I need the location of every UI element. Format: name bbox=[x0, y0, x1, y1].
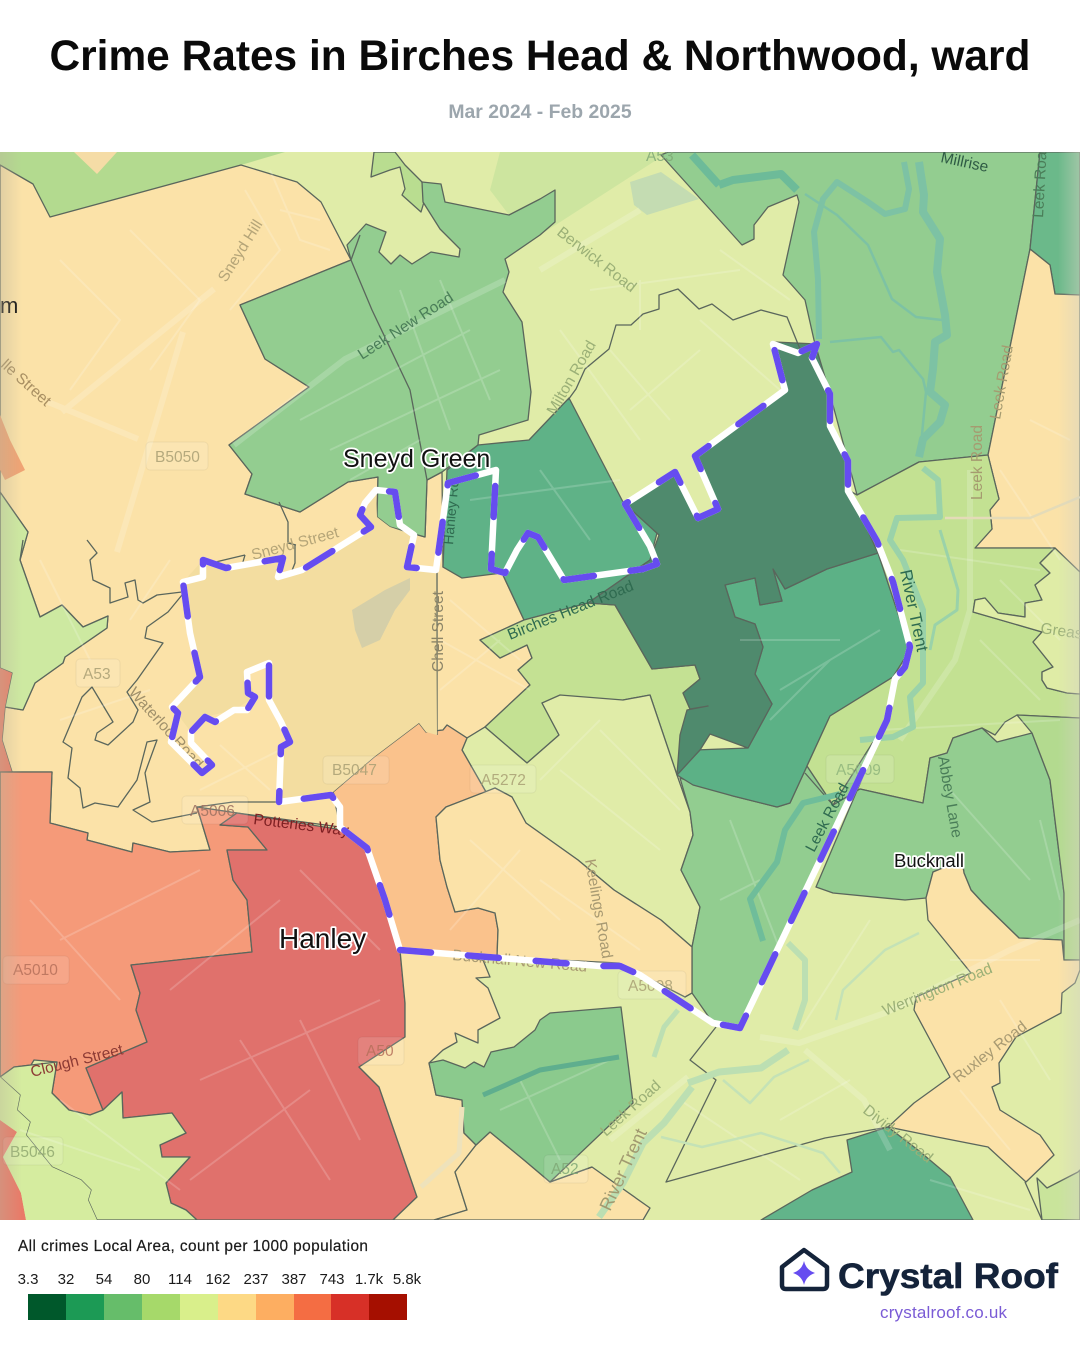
map place and road labels: m bbox=[0, 293, 18, 318]
map place and road labels: Potteries Way bbox=[253, 811, 350, 840]
ward interior tint bbox=[172, 490, 437, 802]
road number badges: A50 bbox=[366, 1043, 394, 1060]
road number badges: A5272 bbox=[481, 772, 526, 789]
road number badges: A5008 bbox=[628, 978, 673, 995]
road number badges: A5006 bbox=[190, 803, 235, 820]
park: grey pond bbox=[352, 578, 410, 648]
road number badges: A5009 bbox=[836, 762, 881, 779]
legend tick labels: 1.7k bbox=[355, 1271, 383, 1288]
ward boundary: Birches Head & Northwood bbox=[171, 344, 910, 1028]
map place and road labels: River Trent bbox=[595, 1125, 651, 1214]
road number badges: B5046 bbox=[10, 1144, 55, 1161]
map place and road labels: Berwick Road bbox=[554, 224, 639, 296]
choropleth map bbox=[0, 152, 1080, 1220]
map regions: crime rate areas bbox=[0, 152, 1080, 1220]
map place and road labels bbox=[0, 136, 1080, 1214]
rivers bbox=[421, 155, 1080, 1217]
place name labels bbox=[279, 445, 964, 954]
map place and road labels: Leek Road bbox=[969, 425, 986, 500]
legend tick labels: 387 bbox=[281, 1271, 307, 1288]
map place and road labels: Leek Road bbox=[803, 781, 853, 855]
subtitle: date range: Mar 2024 - Feb 2025 bbox=[448, 101, 632, 123]
road network bbox=[20, 170, 1080, 1210]
title: Crime Rates in Birches Head & Northwood, ward bbox=[50, 32, 1030, 79]
place name labels: Hanley bbox=[279, 923, 366, 954]
legend tick labels: 114 bbox=[168, 1271, 192, 1288]
legend tick labels: 162 bbox=[205, 1271, 231, 1288]
map place and road labels: Clough Street bbox=[29, 1041, 126, 1081]
road number badges: A5010 bbox=[13, 962, 58, 979]
map place and road labels: Bucknall New Road bbox=[452, 947, 588, 976]
map place and road labels: Leek Road bbox=[597, 1077, 664, 1140]
map place and road labels: Waterloo Road bbox=[125, 684, 206, 772]
legend title: All crimes Local Area, count per 1000 population bbox=[18, 1238, 368, 1255]
road number badges: A53 bbox=[83, 666, 111, 683]
legend tick labels: 5.8k bbox=[393, 1271, 421, 1288]
legend tick labels: 80 bbox=[134, 1271, 150, 1288]
road number badges bbox=[3, 148, 894, 1183]
map place and road labels: Leek Road bbox=[987, 344, 1017, 421]
legend tick labels: 3.3 bbox=[18, 1271, 38, 1288]
road number badges: B5050 bbox=[155, 449, 200, 466]
map place and road labels: Keelings Road bbox=[581, 858, 615, 960]
legend bbox=[18, 1238, 422, 1320]
road number badges: B5047 bbox=[332, 762, 377, 779]
map place and road labels: Hanley Rd bbox=[440, 479, 462, 545]
map place and road labels: Ruxley Road bbox=[950, 1018, 1030, 1086]
map place and road labels: Sneyd Street bbox=[250, 524, 341, 564]
wordmark: Crystal Roof bbox=[838, 1256, 1058, 1296]
legend tick labels: 237 bbox=[243, 1271, 269, 1288]
legend tick labels: 54 bbox=[96, 1271, 112, 1288]
map place and road labels: Werrington Road bbox=[880, 960, 995, 1020]
logo: Crystal Roof bbox=[780, 1248, 1058, 1322]
legend tick labels bbox=[18, 1271, 422, 1288]
place name labels: Bucknall bbox=[894, 850, 964, 871]
icon: house with star bbox=[782, 1250, 827, 1289]
map place and road labels: Chell Street bbox=[430, 590, 447, 672]
map place and road labels: River Trent bbox=[896, 568, 932, 653]
map place and road labels: Milton Road bbox=[544, 338, 600, 418]
legend tick labels: 32 bbox=[58, 1271, 74, 1288]
legend tick labels: 743 bbox=[319, 1271, 345, 1288]
legend colour scale bbox=[28, 1294, 407, 1320]
map place and road labels: Birches Head Road bbox=[505, 578, 636, 644]
map place and road labels: Abbey Lane bbox=[934, 755, 965, 839]
map place and road labels: Dividy Road bbox=[860, 1102, 936, 1167]
map place and road labels: Sneyd Hill bbox=[215, 217, 266, 285]
website url: crystalroof.co.uk bbox=[880, 1303, 1008, 1322]
place name labels: Sneyd Green bbox=[343, 445, 490, 473]
road number badges: A52 bbox=[551, 1161, 579, 1178]
map place and road labels: Leek New Road bbox=[355, 289, 457, 363]
